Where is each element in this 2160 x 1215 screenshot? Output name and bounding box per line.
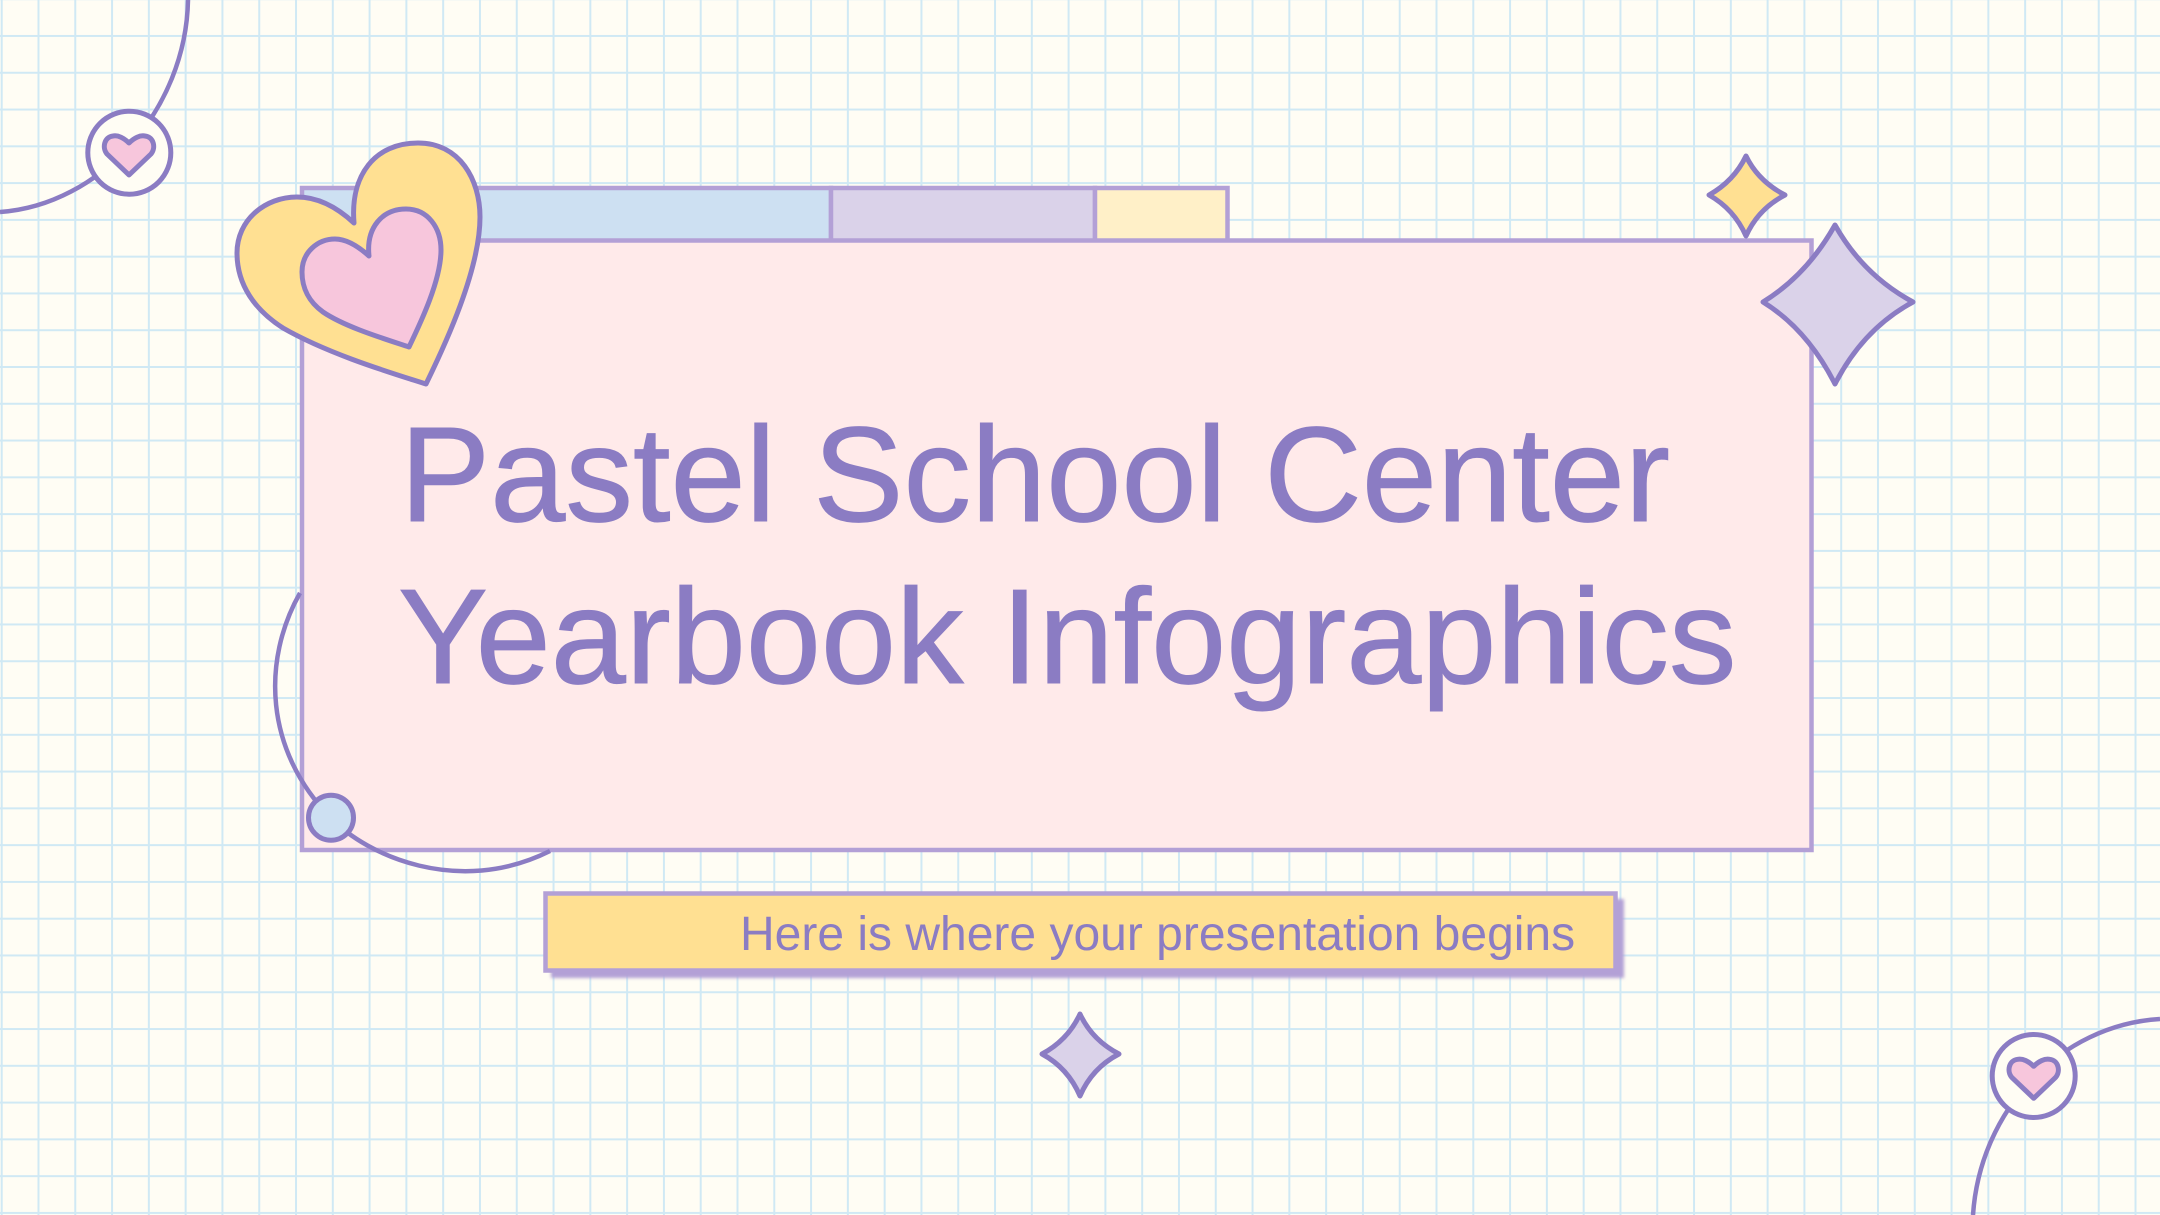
icon: yellow sparkle xyxy=(1709,156,1785,236)
icon: bottom purple sparkle xyxy=(1042,1014,1119,1096)
icon: yellow and pink layered heart xyxy=(237,143,480,384)
main title panel xyxy=(302,240,1812,850)
subtitle banner xyxy=(546,894,1624,978)
folder tab: yellow xyxy=(1095,188,1228,242)
decoration: top-left arc with heart badge xyxy=(0,0,188,212)
folder tab: purple xyxy=(831,188,1095,242)
icon: large purple sparkle xyxy=(1763,225,1913,384)
subtitle banner: Here is where your presentation begins xyxy=(740,908,1575,961)
decoration: left arc with blue dot xyxy=(275,593,550,871)
title: Pastel School Center xyxy=(400,399,1670,550)
folder tab: blue xyxy=(302,188,831,242)
decoration: bottom-right arc with heart badge xyxy=(1973,1019,2160,1215)
title line 2: Yearbook Infographics xyxy=(398,561,1736,712)
